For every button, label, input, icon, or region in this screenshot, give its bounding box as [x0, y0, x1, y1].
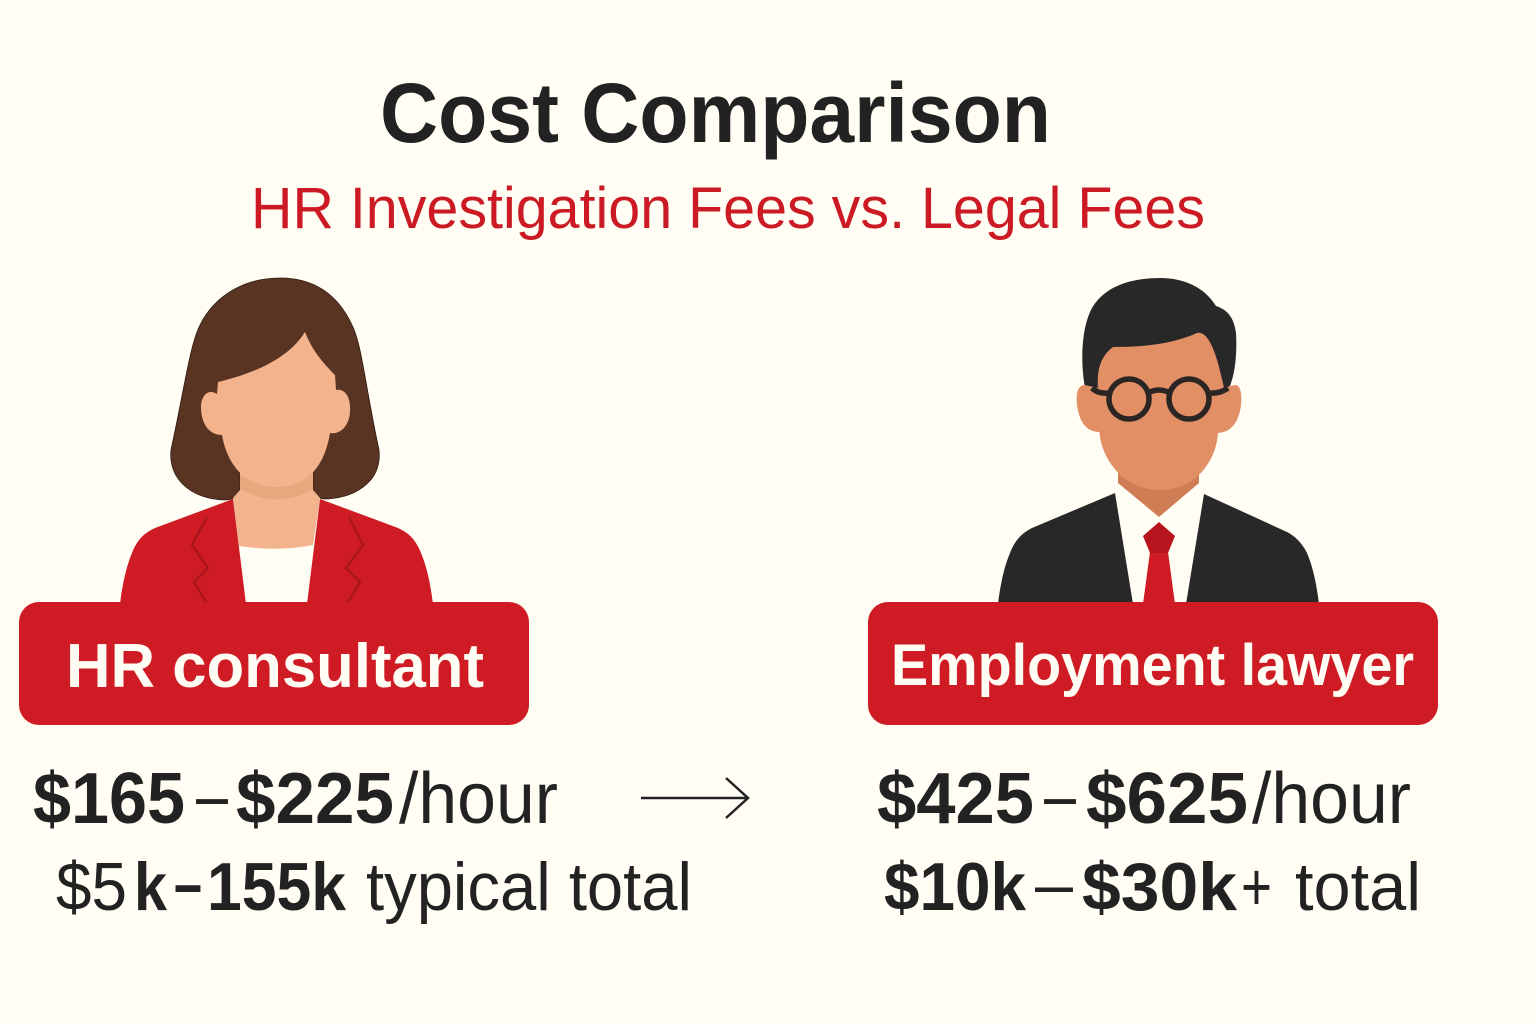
- HR typical total: $5: [56, 849, 127, 925]
- lawyer total: total: [1295, 849, 1421, 925]
- label: HR consultant: HR consultant: [66, 632, 484, 701]
- lawyer total: $30k: [1082, 849, 1237, 925]
- label: Employment lawyer: [868, 602, 1438, 725]
- HR hourly rate: /hour: [399, 759, 558, 839]
- icon: employment lawyer man: [998, 278, 1319, 604]
- glasses: [1092, 379, 1228, 419]
- HR hourly rate: –: [196, 756, 229, 836]
- lawyer total: [884, 846, 1421, 925]
- HR typical total: –: [174, 846, 202, 922]
- lawyer total: +: [1241, 849, 1272, 925]
- lawyer hourly rate: /hour: [1252, 759, 1411, 839]
- HR hourly rate: [33, 756, 558, 839]
- necktie: [1143, 552, 1175, 604]
- subtitle: HR Investigation Fees vs. Legal Fees: [251, 176, 1205, 241]
- HR typical total: typical total: [366, 849, 692, 925]
- HR hourly rate: $165: [33, 759, 185, 839]
- lawyer hourly rate: $425: [877, 759, 1034, 839]
- lawyer hourly rate: –: [1044, 756, 1077, 836]
- lawyer hourly rate: [877, 756, 1411, 839]
- arrow: [641, 778, 748, 818]
- HR typical total: [56, 846, 692, 925]
- label: Employment lawyer: Employment lawyer: [891, 633, 1414, 698]
- HR hourly rate: $225: [236, 759, 394, 839]
- lawyer total: –: [1035, 846, 1073, 922]
- HR typical total: k: [134, 849, 167, 925]
- icon: HR consultant woman: [120, 278, 433, 604]
- lawyer total: $10k: [884, 849, 1026, 925]
- title: Cost Comparison: [380, 66, 1051, 160]
- jacket: [120, 499, 246, 604]
- label: HR consultant: [19, 602, 529, 725]
- lawyer hourly rate: $625: [1086, 759, 1248, 839]
- suit: [998, 493, 1133, 604]
- shirt: [239, 546, 313, 604]
- HR typical total: 155k: [207, 849, 346, 925]
